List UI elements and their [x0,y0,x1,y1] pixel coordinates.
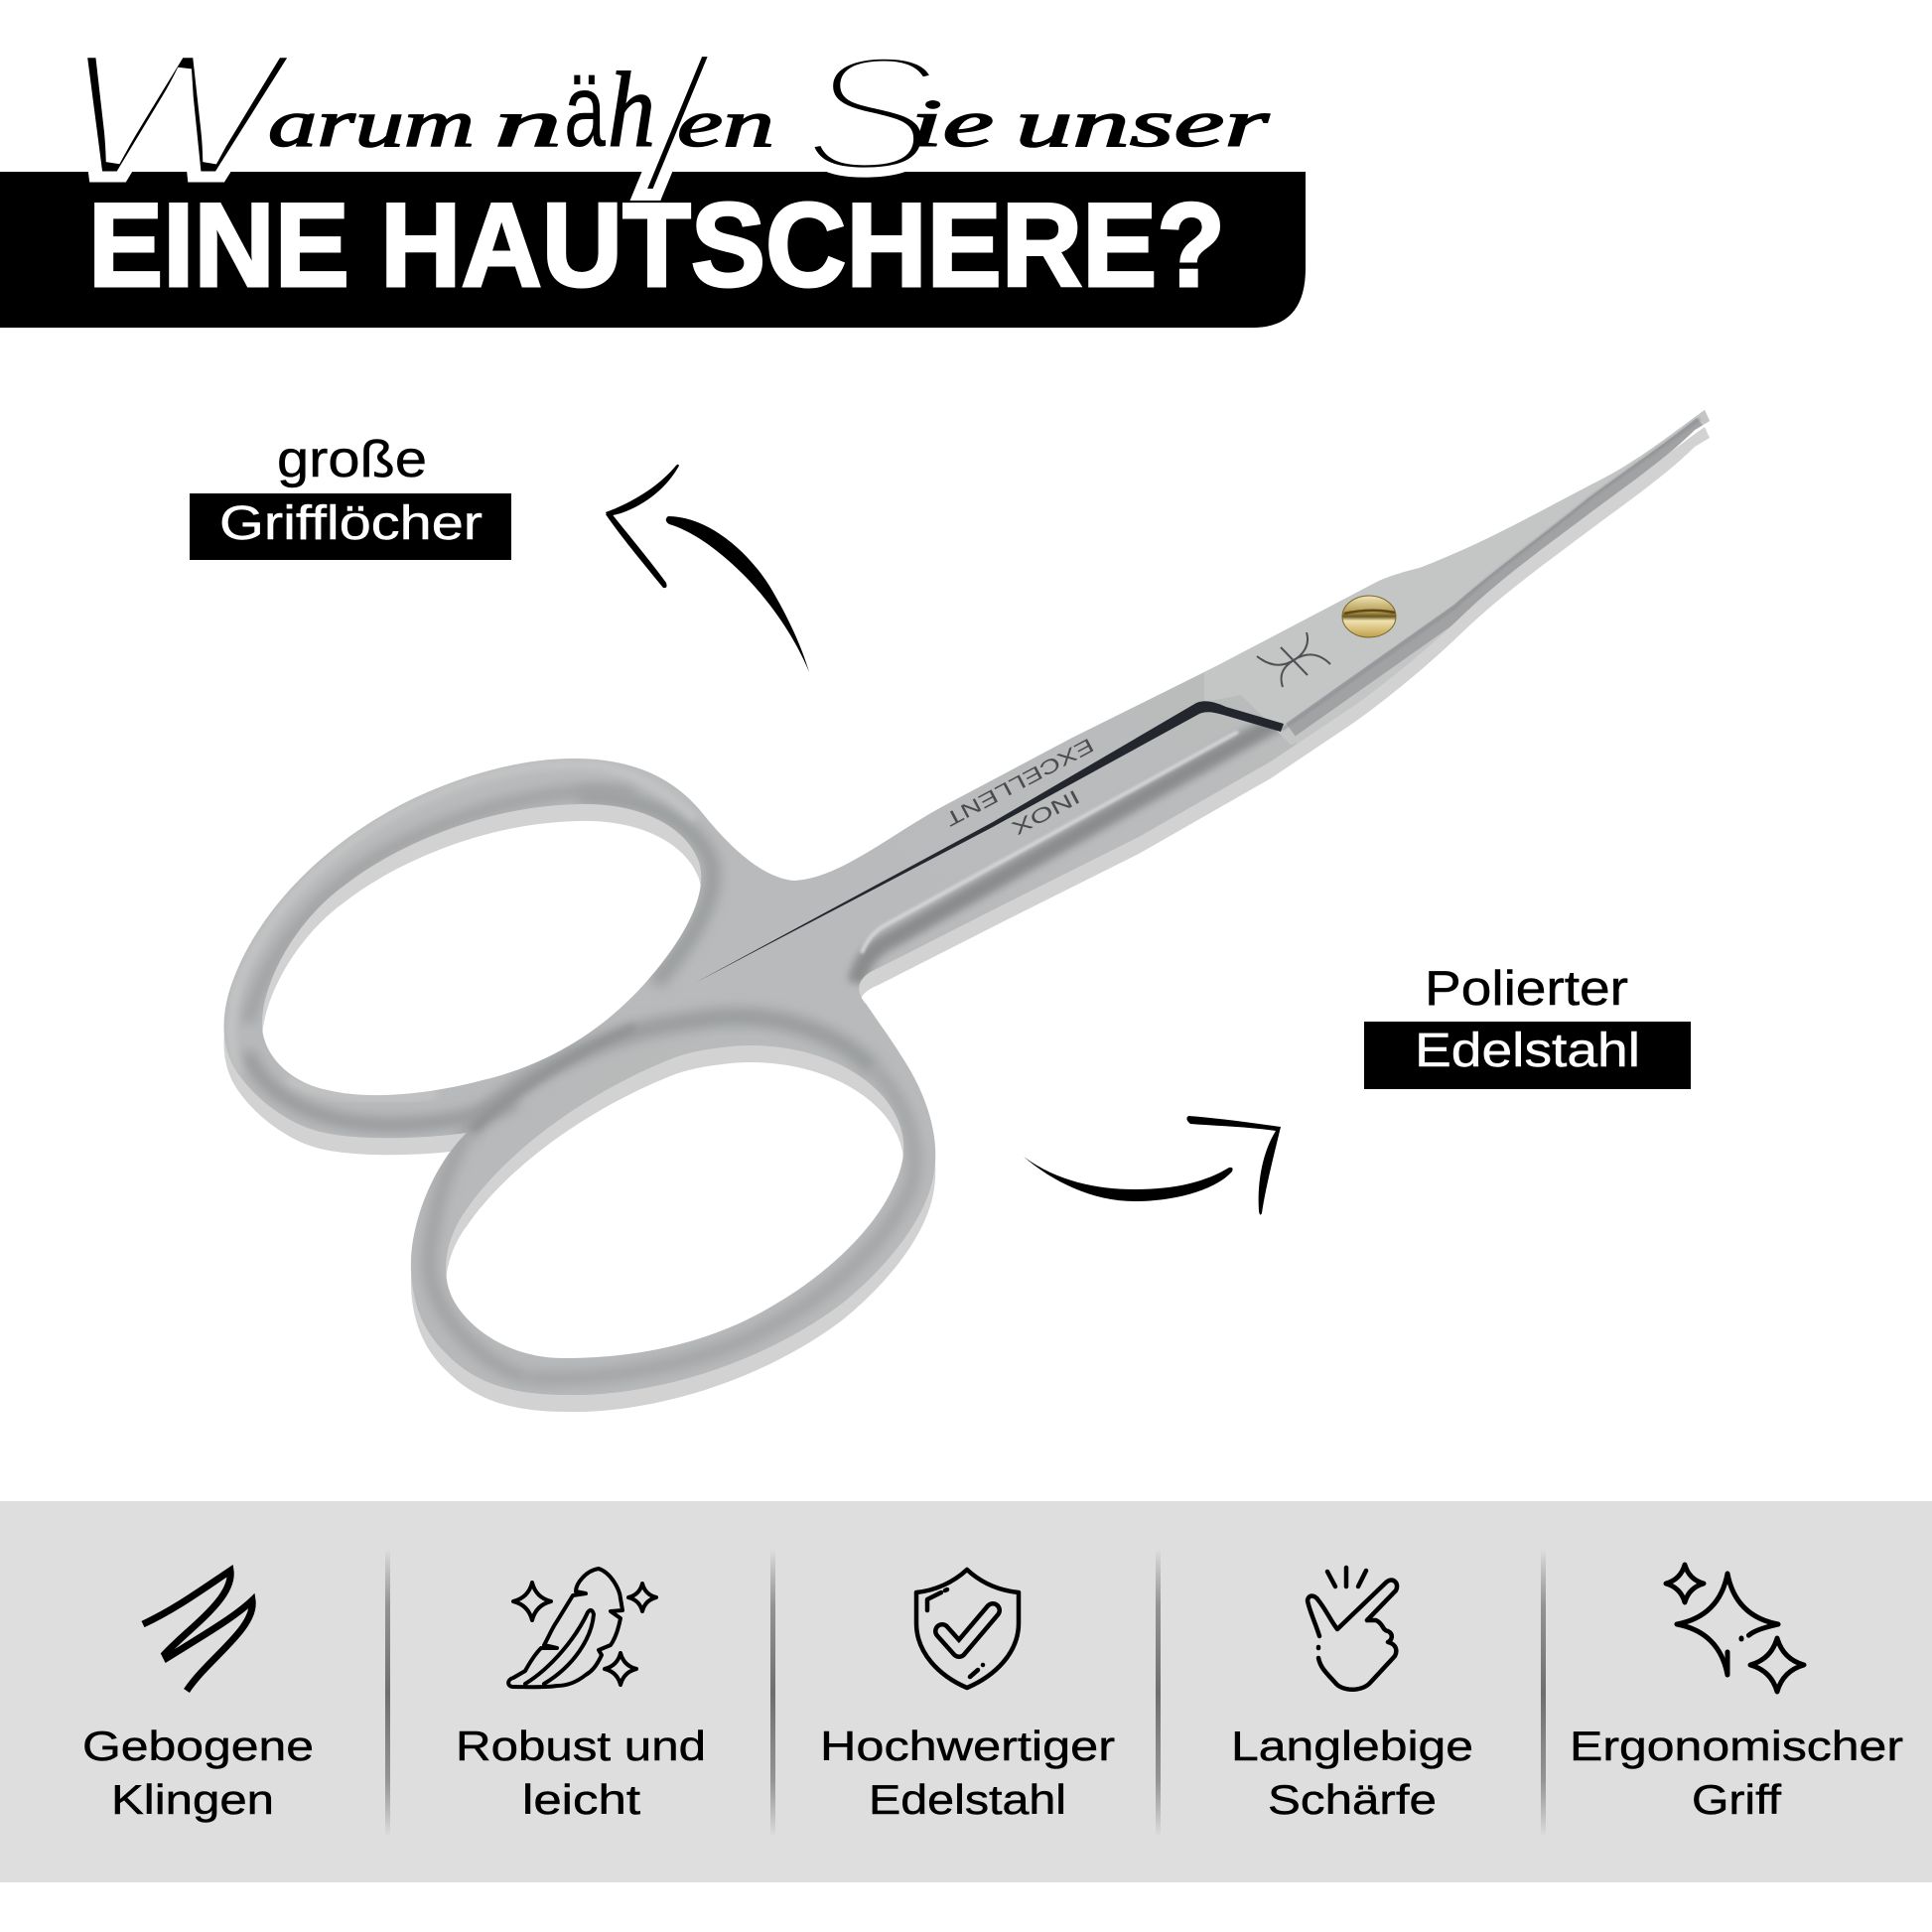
slit between blades [695,701,1284,983]
label: Hochwertiger Edelstahl: Edelstahl [869,1776,1066,1823]
icon: shield with check [916,1570,1019,1688]
engraving: EXCELLENT: EXCELLENT [941,734,1097,830]
script heading: h [608,52,655,170]
feature: Gebogene Klingen [82,1571,314,1823]
label: Gebogene Klingen: Gebogene [82,1723,314,1769]
script heading: l [626,15,725,237]
label: Robust und leicht: leicht [522,1776,640,1823]
scissors shading [231,397,1718,1379]
gold pivot screw [1342,596,1396,637]
label: Hochwertiger Edelstahl: Hochwertiger [820,1723,1115,1769]
arrow: to the steel label [1024,1116,1281,1215]
callout: Polierter Edelstahl: Polierter [1425,962,1628,1016]
script heading: en [677,85,774,161]
callout: Polierter Edelstahl [1364,962,1691,1089]
icon: feather with sparkles [508,1569,656,1687]
label: Langlebige Schärfe: Schärfe [1268,1776,1437,1823]
engraved logo [1257,632,1330,687]
label: Gebogene Klingen: Klingen [111,1776,274,1823]
icon: finger snap [1308,1568,1397,1690]
script heading: S [801,20,939,207]
feature: Langlebige Schärfe [1231,1568,1473,1823]
script heading: unser [1016,85,1270,161]
script heading: n [494,85,562,161]
script heading [60,13,1270,237]
icon: curved blades [143,1571,252,1691]
feature panel [0,1501,1932,1882]
scissors shadow [224,427,1710,1412]
label: Langlebige Schärfe: Langlebige [1231,1723,1473,1769]
label: Ergonomischer Griff: Ergonomischer [1570,1723,1903,1769]
label: Ergonomischer Griff: Griff [1692,1776,1781,1823]
header bar [0,172,1306,328]
callout: Polierter Edelstahl: Edelstahl [1415,1025,1640,1077]
engraving: INOX: INOX [1008,785,1083,839]
script heading: arum [268,85,475,161]
feature: Hochwertiger Edelstahl [820,1570,1115,1823]
feature: Ergonomischer Griff [1570,1565,1903,1823]
label: Robust und leicht: Robust und [456,1723,706,1769]
script heading: ie [910,85,994,161]
script heading: W [60,13,300,215]
feature: Robust und leicht [456,1569,706,1823]
callout: große Grifflöcher: große [277,431,427,488]
icon: sparkles [1666,1565,1804,1692]
callout: große Grifflöcher: Grifflöcher [219,497,483,550]
scissors body [224,410,1710,1395]
panel dividers [385,1549,1546,1837]
script heading: ä [564,54,606,169]
callout: große Grifflöcher [190,431,511,560]
arrow: to the handle label [606,465,809,672]
scissors [224,397,1718,1412]
main heading: EINE HAUTSCHERE? [88,179,1225,312]
